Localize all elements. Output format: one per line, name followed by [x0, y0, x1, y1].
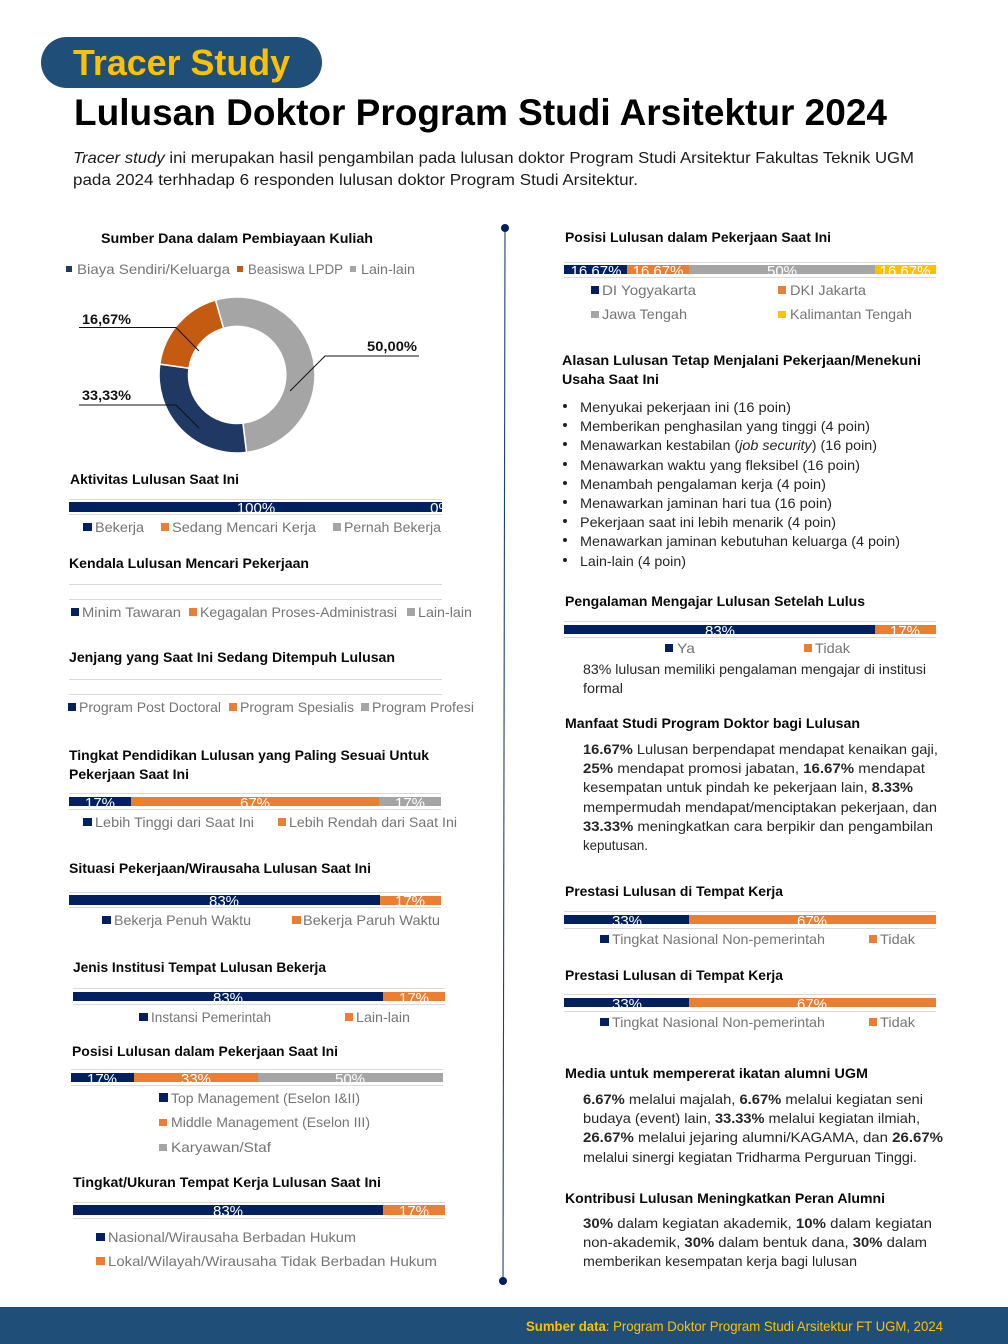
legend: situasi pekerjaan [102, 912, 440, 928]
legend: lokasi: DKI Jakarta [790, 282, 866, 298]
bullet list: alasan: Menawarkan jaminan hari tua (16 poin) [580, 495, 832, 511]
bullet list: alasan: Lain-lain (4 poin) [580, 553, 686, 569]
heading: sumber dana: Sumber Dana dalam Pembiayaan Kuliah [101, 230, 373, 246]
bullet list: alasan: Memberikan penghasilan yang tinggi (4 poin) [580, 418, 870, 434]
stacked bar: lokasi: 16.67% [880, 263, 930, 280]
legend: pengalaman mengajar: Tidak [815, 640, 851, 656]
stacked bar: posisi lulusan kiri: 33% [181, 1071, 211, 1088]
panel: aktivitas [69, 471, 452, 535]
legend: tingkat ukuran: Nasional/Wirausaha Berbadan Hukum [108, 1229, 356, 1245]
panel: alasan [562, 352, 921, 569]
heading: prestasi 2: Prestasi Lulusan di Tempat Kerja [565, 967, 783, 983]
text: media alumni: 6.67% melalui majalah, 6.67% melalui kegiatan seni [583, 1091, 923, 1107]
stacked bar: jenis institusi [73, 988, 445, 1007]
legend: pengalaman mengajar [665, 640, 851, 656]
heading: situasi pekerjaan: Situasi Pekerjaan/Wirausaha Lulusan Saat Ini [69, 860, 371, 876]
legend: jenis institusi [139, 1009, 410, 1025]
text: manfaat studi: kesempatan untuk pindah ke pekerjaan lain, 8.33% [583, 779, 914, 795]
stacked bar: aktivitas: 0% [430, 500, 452, 517]
stacked bar: prestasi 2: 67% [797, 996, 827, 1013]
stacked bar: prestasi 2: 33% [612, 996, 642, 1013]
donut labels and leader lines [79, 311, 419, 428]
panel: situasi pekerjaan [69, 860, 441, 928]
stacked bar: situasi pekerjaan: 17% [395, 893, 425, 910]
heading: kendala: Kendala Lulusan Mencari Pekerjaan [69, 555, 309, 571]
stacked bar: tingkat pendidikan: 17% [85, 795, 115, 812]
legend: kendala: Lain-lain [418, 604, 472, 620]
legend: tingkat pendidikan [83, 814, 457, 830]
legend: pengalaman mengajar: Ya [677, 640, 695, 656]
panel: jenjang [68, 649, 474, 715]
text: pengalaman mengajar: 83% lulusan memiliki pengalaman mengajar di institusi [583, 661, 926, 677]
legend: aktivitas: Pernah Bekerja [344, 519, 441, 535]
text: kontribusi: 30% dalam kegiatan akademik, 10% dalam kegiatan [583, 1215, 932, 1231]
panel: tingkat ukuran tempat kerja [73, 1174, 445, 1269]
legend: tingkat ukuran: Lokal/Wilayah/Wirausaha Tidak Berbadan Hukum [108, 1253, 437, 1269]
heading: aktivitas: Aktivitas Lulusan Saat Ini [70, 471, 239, 487]
stacked bar: aktivitas [69, 499, 442, 515]
heading: tingkat pendidikan: Tingkat Pendidikan Lulusan yang Paling Sesuai Untuk [69, 747, 429, 763]
stacked bar: tingkat pendidikan [69, 794, 441, 812]
donut labels and leader lines: 16,67% [82, 311, 132, 327]
legend: prestasi 2 [600, 1014, 916, 1030]
bullet list: alasan: Menawarkan waktu yang fleksibel (16 poin) [580, 457, 860, 473]
heading: kontribusi: Kontribusi Lulusan Meningkatkan Peran Alumni [565, 1190, 885, 1206]
stacked bar: lokasi [564, 262, 936, 280]
legend: tingkat pendidikan: Lebih Rendah dari Saat Ini [289, 814, 457, 830]
text: kontribusi [583, 1215, 932, 1269]
panel: jenis institusi [73, 959, 445, 1025]
bullet list: alasan: Menyukai pekerjaan ini (16 poin) [580, 399, 791, 415]
stacked bar: posisi lulusan kiri: 50% [335, 1071, 365, 1088]
panel: posisi lulusan kiri [71, 1043, 443, 1155]
title pill: Tracer Study: Tracer Study [73, 42, 290, 83]
stacked bar: tingkat pendidikan: 17% [395, 795, 425, 812]
intro text [73, 150, 914, 189]
stacked bar: lokasi: 16.67% [571, 263, 621, 280]
heading: tingkat pendidikan: Pekerjaan Saat Ini [69, 766, 189, 782]
stacked bar: prestasi 1: 33% [612, 913, 642, 930]
stacked bar: situasi pekerjaan: 83% [209, 893, 239, 910]
stacked bar: lokasi: 50% [767, 263, 797, 280]
stacked bar: posisi lulusan kiri: 17% [87, 1071, 117, 1088]
panel: manfaat studi [565, 715, 938, 853]
text: media alumni: 26.67% melalui jejaring alumni/KAGAMA, dan 26.67% [583, 1129, 944, 1145]
stacked bar: tingkat pendidikan: 67% [240, 795, 270, 812]
stacked bar: lokasi: 16.67% [633, 263, 683, 280]
text: manfaat studi: 16.67% Lulusan berpendapat mendapat kenaikan gaji, [583, 741, 938, 757]
text: manfaat studi: 25% mendapat promosi jabatan, 16.67% mendapat [583, 760, 925, 776]
text: kontribusi: memberikan kesempatan kerja bagi lulusan [583, 1253, 857, 1269]
legend: situasi pekerjaan: Bekerja Penuh Waktu [114, 912, 251, 928]
legend: jenis institusi: Lain-lain [356, 1009, 410, 1025]
heading: posisi lulusan kiri: Posisi Lulusan dalam Pekerjaan Saat Ini [72, 1043, 338, 1059]
text: media alumni: budaya (event) lain, 33.33% melalui kegiatan ilmiah, [583, 1110, 920, 1126]
bullet list: alasan: Menawarkan kestabilan ( job security) (16 poin) [580, 437, 877, 453]
legend: jenjang: Program Spesialis [240, 699, 354, 715]
stacked bar: pengalaman mengajar [564, 622, 936, 640]
text: manfaat studi [583, 741, 938, 853]
legend: sumber dana: Beasiswa LPDP [248, 261, 343, 277]
stacked bar: tingkat ukuran: 17% [399, 1203, 429, 1220]
stacked bar: jenis institusi: 17% [399, 990, 429, 1007]
legend: lokasi: Kalimantan Tengah [790, 306, 912, 322]
intro text: pada 2024 terhhadap 6 responden lulusan doktor Program Studi Arsitektur. [73, 172, 638, 189]
stacked bar: pengalaman mengajar: 83% [705, 623, 735, 640]
stacked bar: posisi lulusan kiri [71, 1070, 443, 1088]
stacked bar: situasi pekerjaan [69, 892, 441, 910]
heading: media alumni: Media untuk mempererat ikatan alumni UGM [565, 1065, 868, 1081]
legend: posisi lulusan kiri: Middle Management (Eselon III) [171, 1114, 370, 1130]
legend: kendala: Kegagalan Proses-Administrasi [200, 604, 397, 620]
title pill: Tracer Study [41, 37, 322, 88]
panel: prestasi 1 [564, 883, 936, 947]
text: pengalaman mengajar [583, 661, 926, 696]
panel: kendala [69, 555, 472, 620]
panel: prestasi 2 [564, 967, 936, 1030]
legend: tingkat pendidikan: Lebih Tinggi dari Saat Ini [95, 814, 254, 830]
legend: prestasi 1: Tingkat Nasional Non-pemerintah [612, 931, 825, 947]
heading: alasan: Alasan Lulusan Tetap Menjalani Pekerjaan/Menekuni [562, 352, 921, 368]
panel: pengalaman mengajar [564, 593, 936, 696]
heading: pengalaman mengajar: Pengalaman Mengajar Lulusan Setelah Lulus [565, 593, 865, 609]
legend: aktivitas [83, 519, 441, 535]
bullet list: alasan: Pekerjaan saat ini lebih menarik (4 poin) [580, 514, 836, 530]
text: pengalaman mengajar: formal [583, 680, 623, 696]
legend: jenjang: Program Profesi [372, 699, 474, 715]
panel: posisi lulusan kanan [564, 229, 936, 322]
heading: manfaat studi: Manfaat Studi Program Doktor bagi Lulusan [565, 715, 860, 731]
text: manfaat studi: mempermudah mendapat/menciptakan pekerjaan, dan [583, 799, 937, 815]
legend: posisi lulusan kiri [159, 1090, 370, 1155]
intro text: Tracer study ini merupakan hasil pengambilan pada lulusan doktor Program Studi Arsitektur Fakultas Teknik UGM [73, 150, 914, 167]
stacked bar: prestasi 1: 67% [797, 913, 827, 930]
title: Lulusan Doktor Program Studi Arsitektur 2024 [74, 92, 887, 133]
empty chart: kendala [69, 584, 442, 600]
heading: prestasi 1: Prestasi Lulusan di Tempat Kerja [565, 883, 783, 899]
legend: kendala: Minim Tawaran [82, 604, 181, 620]
legend: posisi lulusan kiri: Top Management (Eselon I&II) [171, 1090, 360, 1106]
bullet list: alasan: Menambah pengalaman kerja (4 poin) [580, 476, 826, 492]
stacked bar: aktivitas: 100% [237, 500, 275, 517]
stacked bar: tingkat ukuran: 83% [213, 1203, 243, 1220]
stacked bar: prestasi 2 [564, 994, 936, 1013]
legend: prestasi 2: Tingkat Nasional Non-pemerintah [612, 1014, 825, 1030]
empty chart: jenjang [69, 680, 442, 694]
donut labels and leader lines: 50,00% [367, 338, 418, 354]
heading: alasan: Usaha Saat Ini [562, 371, 659, 387]
stacked bar: tingkat ukuran [73, 1202, 445, 1220]
legend: jenis institusi: Instansi Pemerintah [151, 1009, 271, 1025]
legend: sumber dana: Biaya Sendiri/Keluarga [77, 261, 230, 277]
stacked bar: jenis institusi: 83% [213, 990, 243, 1007]
stacked bar: prestasi 1 [564, 912, 936, 930]
text: manfaat studi: keputusan. [583, 837, 648, 853]
center divider with end dots [499, 224, 509, 1285]
legend: prestasi 2: Tidak [880, 1014, 916, 1030]
footer: sumber data: Sumber data: Program Doktor Program Studi Arsitektur FT UGM, 2024 [526, 1318, 943, 1334]
legend: lokasi: DI Yogyakarta [602, 282, 696, 298]
heading: tingkat ukuran: Tingkat/Ukuran Tempat Kerja Lulusan Saat Ini [73, 1174, 381, 1190]
legend: prestasi 1 [600, 931, 916, 947]
panel: kontribusi [565, 1190, 932, 1269]
heading: jenjang: Jenjang yang Saat Ini Sedang Ditempuh Lulusan [69, 649, 395, 665]
legend: sumber dana [66, 261, 415, 277]
panel: sumber dana [66, 230, 419, 453]
heading: alasan [562, 352, 921, 387]
legend: aktivitas: Bekerja [95, 519, 144, 535]
footer: sumber data [0, 1307, 1008, 1344]
donut labels and leader lines: 33,33% [82, 387, 132, 403]
bullet list: alasan: Menawarkan jaminan kebutuhan keluarga (4 poin) [580, 533, 900, 549]
legend: situasi pekerjaan: Bekerja Paruh Waktu [303, 912, 440, 928]
legend: sumber dana: Lain-lain [361, 261, 415, 277]
legend: jenjang [68, 699, 474, 715]
donut chart [159, 297, 315, 453]
legend: prestasi 1: Tidak [880, 931, 916, 947]
stacked bar: pengalaman mengajar: 17% [890, 623, 920, 640]
heading: tingkat pendidikan [69, 747, 429, 782]
heading: jenis institusi: Jenis Institusi Tempat Lulusan Bekerja [73, 959, 326, 975]
legend: lokasi: Jawa Tengah [602, 306, 687, 322]
bullet list: alasan [563, 399, 900, 569]
legend: lokasi [591, 282, 912, 322]
text: media alumni [583, 1091, 944, 1165]
legend: jenjang: Program Post Doctoral [79, 699, 221, 715]
panel: tingkat pendidikan [69, 747, 457, 830]
legend: tingkat ukuran [96, 1229, 437, 1269]
legend: posisi lulusan kiri: Karyawan/Staf [171, 1139, 271, 1155]
text: manfaat studi: 33.33% meningkatkan cara berpikir dan pengambilan [583, 818, 933, 834]
text: kontribusi: non-akademik, 30% dalam bentuk dana, 30% dalam [583, 1234, 927, 1250]
heading: posisi lulusan kanan: Posisi Lulusan dalam Pekerjaan Saat Ini [565, 229, 831, 245]
legend: aktivitas: Sedang Mencari Kerja [172, 519, 316, 535]
panel: media alumni [565, 1065, 944, 1165]
text: media alumni: melalui sinergi kegiatan Tridharma Perguruan Tinggi. [583, 1149, 917, 1165]
legend: kendala [71, 604, 472, 620]
